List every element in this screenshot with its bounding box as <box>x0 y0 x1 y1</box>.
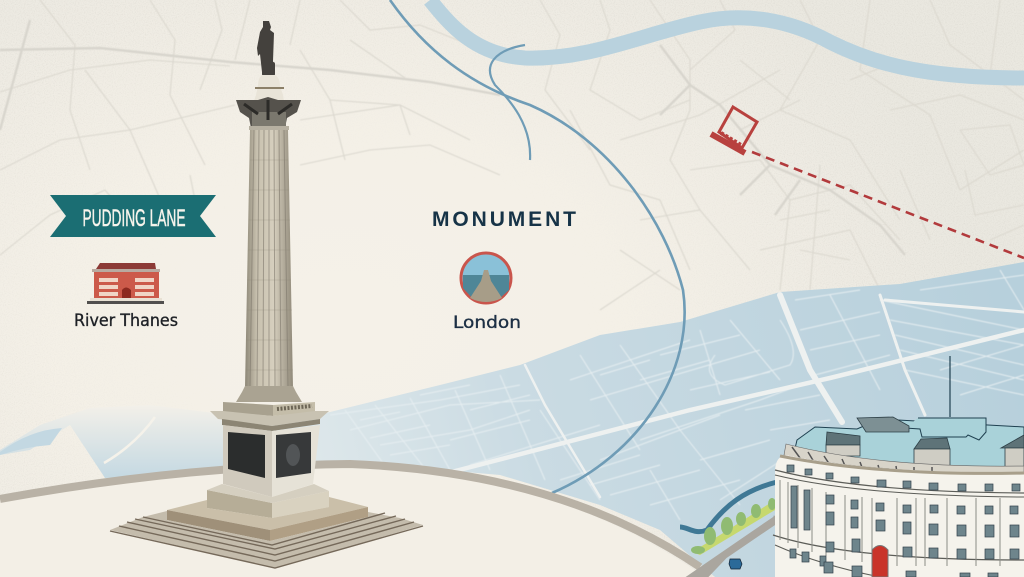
red door <box>872 546 888 577</box>
left plaque <box>228 432 265 478</box>
pilasters <box>780 480 1000 566</box>
dark canal edge by the building <box>680 482 777 532</box>
cornice lines <box>773 456 1024 577</box>
right plaque <box>276 432 311 478</box>
water area: lower left <box>0 405 270 478</box>
white street grid over water <box>330 270 1024 520</box>
balustrade <box>784 444 1024 473</box>
stairs <box>110 511 423 568</box>
corner building <box>773 356 1024 577</box>
pedestal cap <box>210 411 329 426</box>
thin blue river curves <box>390 0 685 493</box>
main grey roads <box>0 20 905 255</box>
trees <box>691 498 776 554</box>
pedestal right face <box>272 425 320 497</box>
antenna <box>949 356 951 417</box>
roof <box>790 419 1024 470</box>
white road across left water <box>104 417 155 463</box>
left river sliver <box>0 428 62 455</box>
inscribed die <box>223 402 273 416</box>
roof ridge outline <box>905 418 986 440</box>
roof skylights <box>826 417 1024 470</box>
windows <box>787 465 1020 577</box>
river thames, upper band <box>430 0 1024 78</box>
stone base block <box>207 490 272 518</box>
water area: lower right <box>270 262 1024 577</box>
cream ground <box>0 465 705 577</box>
icon: red brick building <box>87 263 164 304</box>
pedestal left face <box>223 425 272 497</box>
street network on land <box>0 0 1024 310</box>
grey road by the building <box>690 516 776 577</box>
icon: round monument photo <box>461 253 511 303</box>
label: River Thanes: River Thanes <box>74 311 178 331</box>
monument column <box>110 21 423 568</box>
small blue vehicle <box>729 559 742 569</box>
dome drum <box>254 75 284 101</box>
banner: Pudding Lane <box>50 195 216 237</box>
facade <box>775 455 1024 577</box>
statue <box>257 21 275 76</box>
label: London: London <box>453 313 521 333</box>
grey ground border <box>0 464 700 567</box>
capital <box>236 97 301 130</box>
green park strip <box>691 498 776 555</box>
red dashed route line <box>752 152 1024 258</box>
fluted shaft <box>245 130 293 388</box>
banner label: PUDDING LANE <box>82 205 186 232</box>
upper platform <box>167 497 368 530</box>
heading: Monument: MONUMENT <box>432 208 576 231</box>
shaft base mouldings <box>236 386 302 402</box>
icon: tilted red building marker <box>711 107 757 153</box>
major white avenues in water <box>440 295 1024 497</box>
